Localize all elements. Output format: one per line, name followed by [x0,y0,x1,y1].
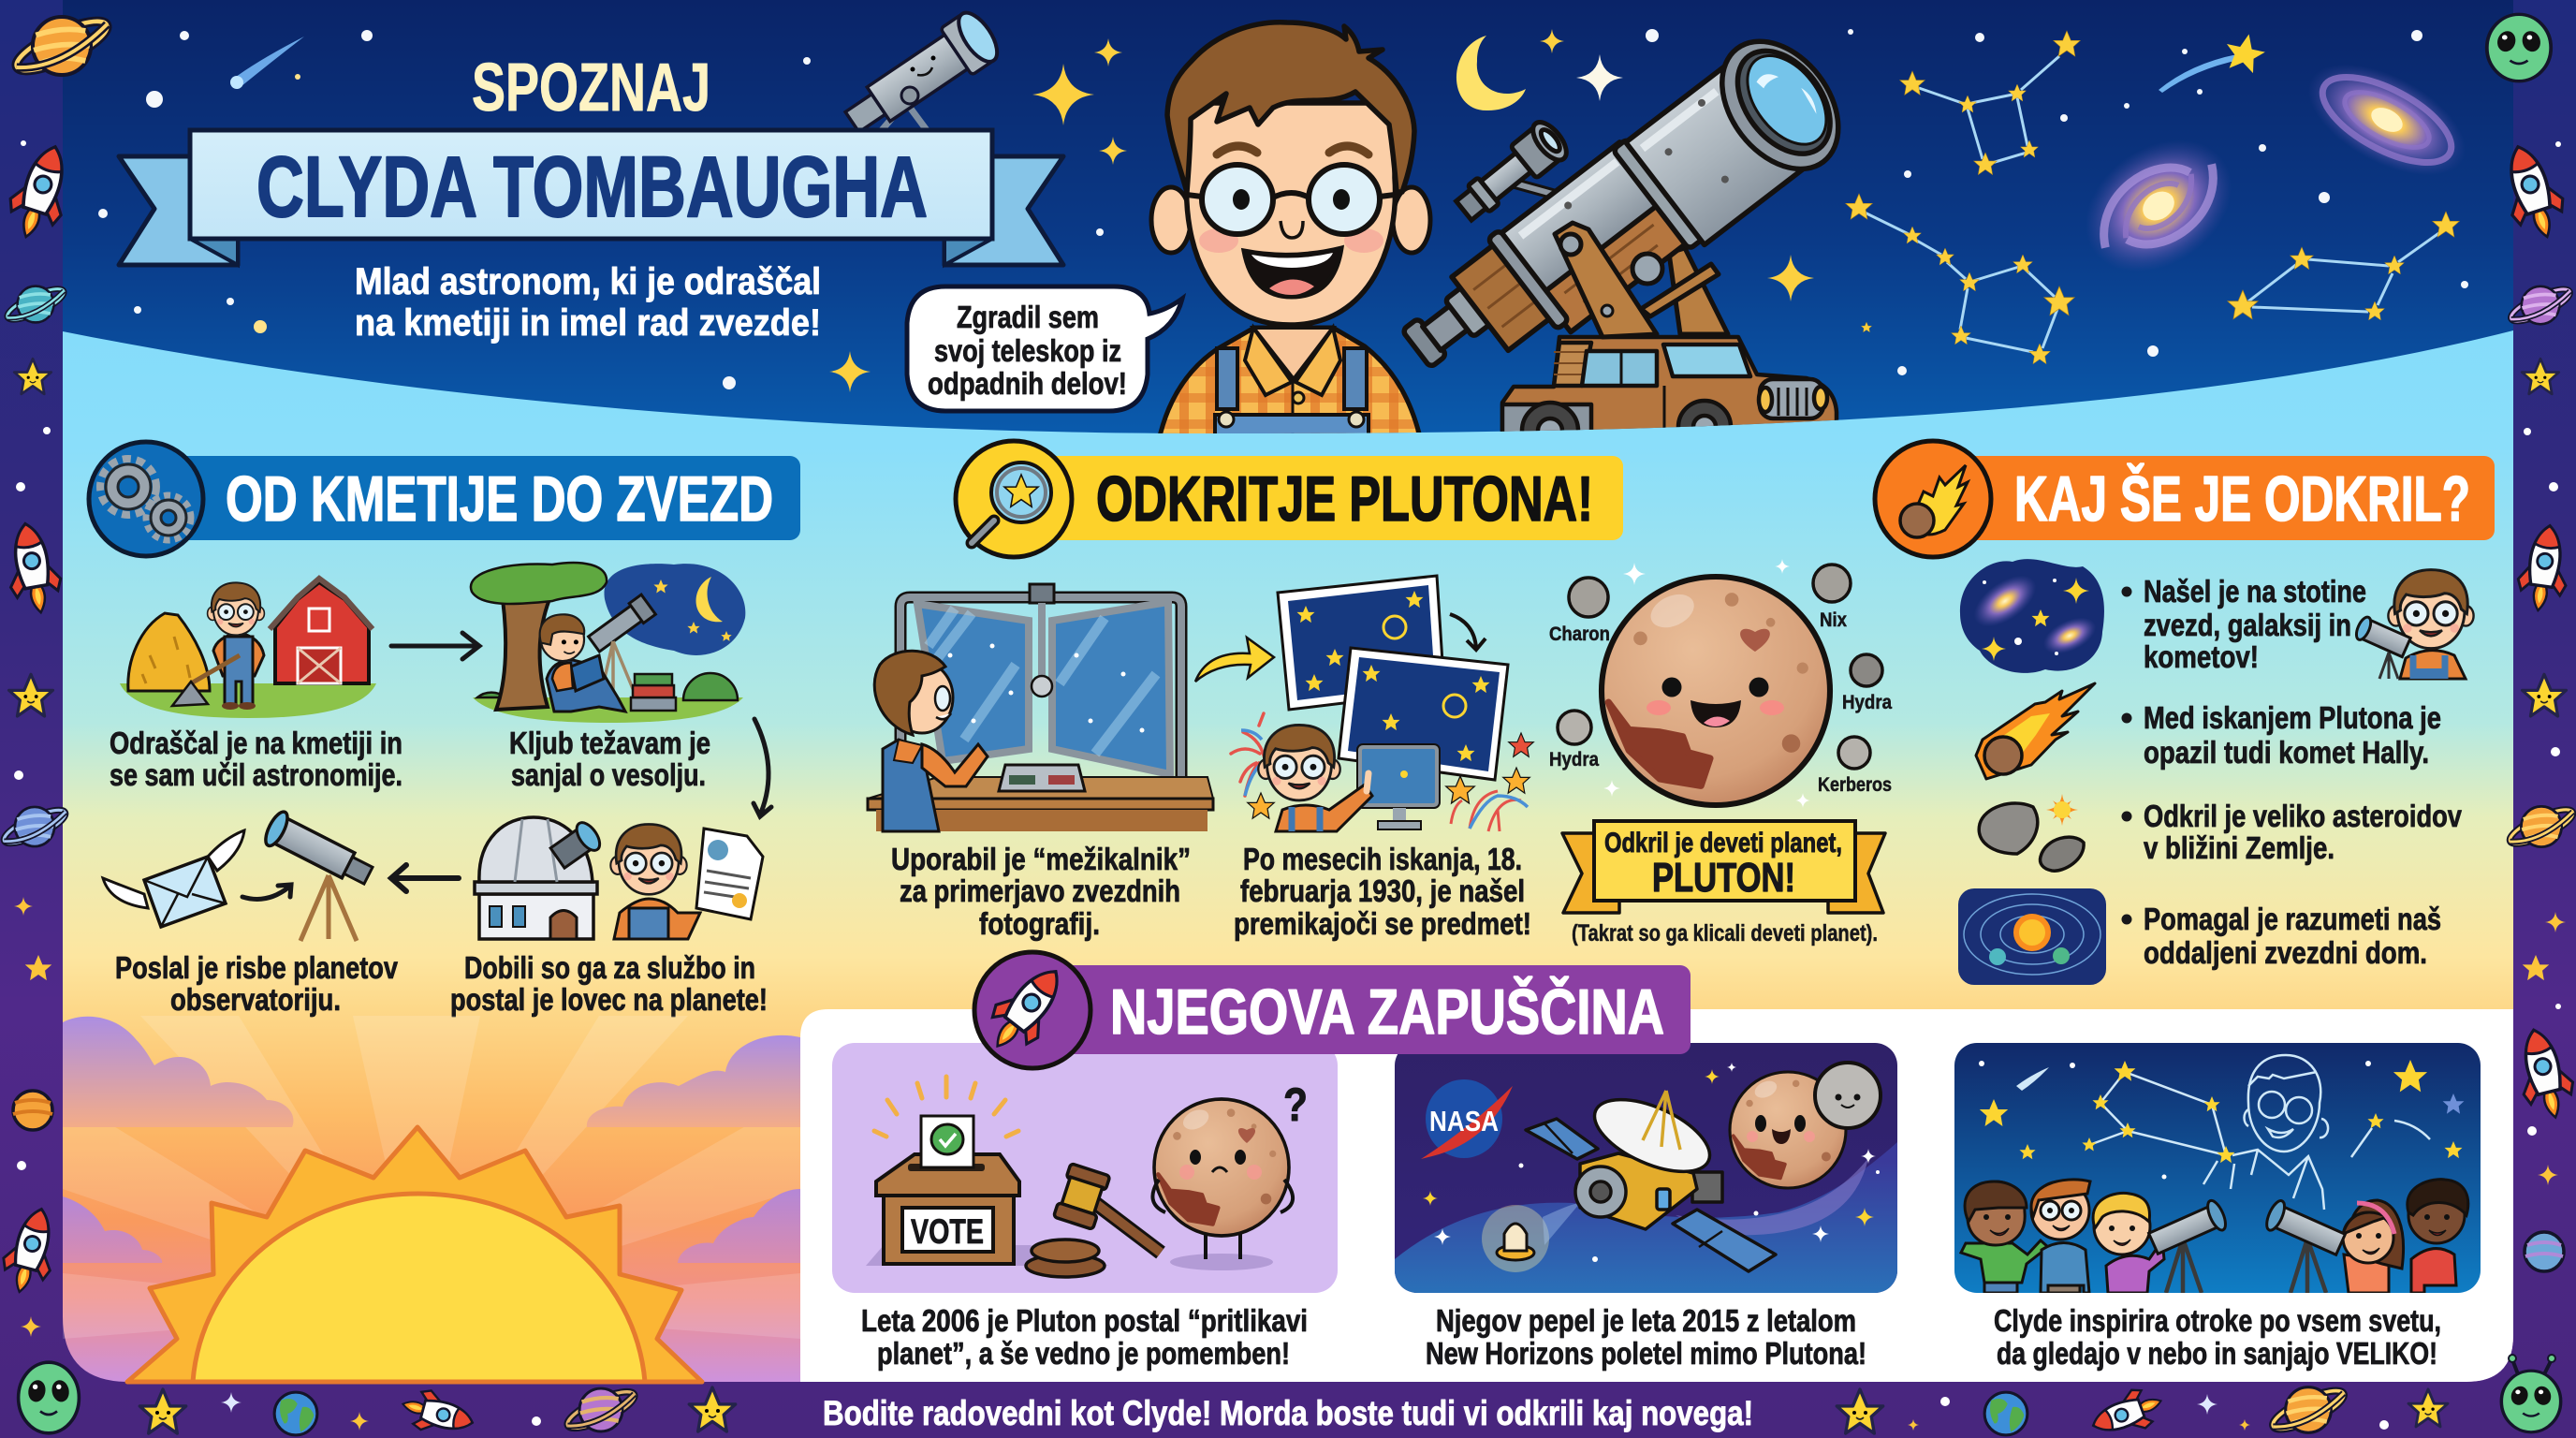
text: asteroids: v bližini Zemlje. [2144,830,2334,865]
label: Kerberos: Kerberos [1818,774,1892,796]
photo one [1278,576,1444,710]
boy profile [874,651,988,831]
caption: dreamed of space: sanjal o vesolju. [511,757,706,792]
caption: blink comparator text: Uporabil je “mežikalnik” [891,842,1191,876]
card: inspiring children [1954,1043,2481,1293]
constellations [1846,31,2459,364]
banner: ninth planet Pluton: Odkril je deveti planet, [1604,828,1842,858]
banner: ninth planet Pluton: PLUTON! [1652,855,1795,901]
subtitle: Mlad astronom, ki je odraščal [355,261,821,302]
caption: grew up on farm: se sam učil astronomije. [110,757,402,792]
galaxies [2060,41,2483,300]
glasses [1187,165,1395,234]
Pluto and Charon [1730,1063,1881,1188]
text: our distant home: oddaljeni zvezdni dom. [2144,935,2427,970]
caption: inspires children: Clyde inspirira otroke po vsem svetu, [1994,1303,2441,1338]
sky constellation and ghost portrait [2089,1055,2328,1210]
caption: discovery date: premikajoči se predmet! [1234,906,1531,941]
caption: dwarf planet [861,1303,1308,1371]
mouth [1244,248,1341,297]
caption: sent drawings: observatoriju. [170,982,341,1017]
spacecraft [1526,1085,1776,1271]
illustration: Pluto with moons [1558,559,1882,808]
illustration: boy at monitor with fireworks [1231,713,1533,831]
logo: NASA: NASA [1429,1105,1499,1137]
console [999,765,1085,791]
icon: small smiling telescope [837,7,1004,145]
text: stars galaxies comets [2121,574,2366,674]
arrow left [391,865,459,891]
logo: NASA [1421,1079,1513,1159]
mount planks [1641,248,1728,334]
header: Kaj se je odkril [1875,441,2495,557]
banner: ninth planet Pluton [1562,821,1885,913]
subtitle [355,261,821,344]
card: dwarf planet vote [832,1043,1338,1293]
caption: discovery date: februarja 1930, je našel [1240,873,1525,908]
desk [868,777,1213,831]
curved arrow [754,719,771,816]
icon: galaxies [1960,559,2104,673]
brows, blush, nose [1199,146,1383,253]
title ribbon: Clyda Tombaugha [119,130,1063,265]
curved arrow [1450,614,1486,650]
children with telescopes [1961,1180,2468,1293]
caption: dwarf planet: planet”, a še vedno je pomemben! [877,1336,1290,1371]
icon: flying envelope [103,830,244,927]
panel: legacy [800,952,2513,1382]
white panel background [800,1009,2513,1382]
caption: blink comparator text: fotografij. [979,906,1100,941]
speech bubble [907,286,1182,411]
icon: meteor [230,37,304,89]
caption: planet hunter job [450,950,768,1017]
label: Nix: Nix [1820,609,1847,631]
text: comet Halley [2121,700,2441,770]
crescent moon [1456,36,1526,110]
caption: inspires children [1994,1303,2441,1371]
text: comet Halley: Med iskanjem Plutona je [2144,700,2441,735]
arrow yellow [1195,638,1274,682]
caption: sent drawings [115,950,399,1017]
header: Njegova zapuscina [974,952,1690,1068]
text: stars galaxies comets: zvezd, galaksij in [2144,608,2351,642]
sky dots and sparkles [98,29,2468,392]
text: asteroids: Odkril je veliko asteroidov [2144,799,2463,833]
heading: Spoznaj: SPOZNAJ [472,51,710,125]
face [1187,103,1396,325]
header: Odkritje Plutona: ODKRITJE PLUTONA! [1096,463,1593,535]
text: asteroids [2121,799,2463,865]
title ribbon: Clyda Tombaugha: CLYDA TOMBAUGHA [256,139,928,235]
photo two [1339,648,1508,780]
small curved arrow [242,885,291,899]
subtitle: na kmetiji in imel rad zvezde! [355,302,821,344]
illustration: sunset with sun and clouds [63,1016,800,1382]
illustration: star photographs [1278,576,1508,780]
icon: telescope on tripod [261,809,377,941]
panel: what else he discovered [1875,441,2495,985]
frame and windows [900,584,1181,786]
speech bubble: odpadnih delov! [928,366,1127,401]
card: New Horizons [1395,1043,1897,1293]
note: ninth planet: (Takrat so ga klicali deveti planet). [1572,920,1878,946]
icon: asteroids [1979,791,2084,871]
ears [1151,187,1430,253]
illustration: boy on the farm [120,579,376,718]
caption: grew up on farm [110,726,402,792]
illustration: boy with certificate [610,824,763,939]
text: our distant home [2121,902,2441,970]
card: dwarf planet vote: VOTE [911,1212,984,1251]
ash capsule [1482,1203,1580,1272]
hair [1167,22,1414,192]
caption: New Horizons [1426,1303,1866,1371]
caption: dwarf planet: Leta 2006 je Pluton postal “pritlikavi [861,1303,1308,1338]
speech bubble: Zgradil sem [957,300,1099,334]
front plank with pivots [1555,223,1662,337]
character: young Clyde with telescope on truck [1151,19,1862,459]
shirt and overalls [1158,323,1421,433]
footer message: Bodite radovedni kot Clyde! Morda boste tudi vi odkrili kaj novega! [823,1394,1753,1432]
illustration: blink comparator [868,584,1213,831]
label: Hydra right: Hydra [1842,692,1892,713]
lower daylight background [63,318,2513,1382]
text: our distant home: Pomagal je razumeti naš [2144,902,2441,936]
header: Njegova zapuscina: NJEGOVA ZAPUŠČINA [1110,976,1664,1048]
caption: New Horizons: New Horizons poletel mimo Plutona! [1426,1336,1866,1371]
text: stars galaxies comets: kometov! [2144,639,2259,674]
panel: From farm to stars [89,442,800,1017]
header night sky [63,0,2513,433]
header: Odkritje Plutona [956,441,1623,557]
speech bubble: svoj teleskop iz [934,333,1121,368]
truck [1500,335,1838,432]
caption: discovery date [1234,842,1531,941]
caption: grew up on farm: Odraščal je na kmetiji in [110,726,402,760]
header: Od kmetije do zvezd: OD KMETIJE DO ZVEZD [226,463,773,535]
caption: blink comparator text [891,842,1191,941]
text: comet Halley: opazil tudi komet Hally. [2144,735,2429,770]
caption: planet hunter job: postal je lovec na planete! [450,982,768,1017]
panel: discovery of Pluto [868,441,1892,946]
caption: dreamed of space [509,726,710,792]
card: dwarf planet vote: ? [1283,1078,1308,1131]
shooting star [2159,30,2268,93]
caption: discovery date: Po mesecih iskanja, 18. [1243,842,1522,876]
illustration: boy with telescope [2353,570,2474,679]
caption: blink comparator text: za primerjavo zvezdnih [900,873,1180,908]
illustration: stargazing under a tree [471,563,745,723]
illustration: observatory [475,817,605,939]
label: Hydra left: Hydra [1549,749,1599,770]
icon: comet [1976,683,2095,779]
main telescope tube [1402,39,1840,368]
caption: New Horizons: Njegov pepel je leta 2015 z letalom [1436,1303,1856,1338]
finder scope [1453,120,1569,224]
header: Od kmetije do zvezd [89,442,800,556]
arrow [391,633,479,659]
icon: solar system [1958,888,2106,985]
caption: planet hunter job: Dobili so ga za službo in [464,950,755,985]
caption: inspires children: da gledajo v nebo in sanjajo VELIKO! [1997,1336,2437,1371]
label: Charon: Charon [1549,624,1610,645]
caption: dreamed of space: Kljub težavam je [509,726,710,760]
text: stars galaxies comets: Našel je na stotine [2144,574,2366,609]
caption: sent drawings: Poslal je risbe planetov [115,950,399,985]
